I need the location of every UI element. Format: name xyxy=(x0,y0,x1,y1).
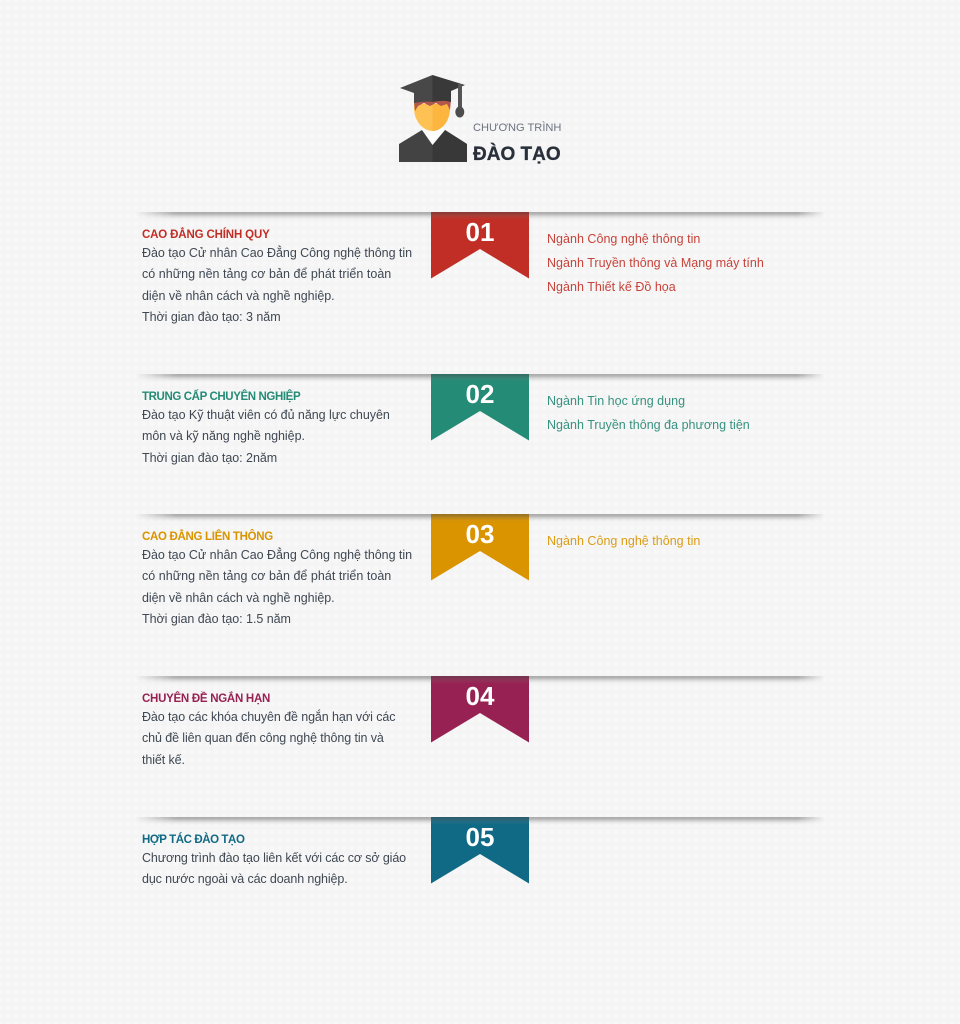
text 04: thiết kế. xyxy=(142,753,185,767)
text 01: Thời gian đào tạo: 3 năm xyxy=(142,310,281,324)
heading 03: CAO ĐẲNG LIÊN THÔNG xyxy=(142,531,273,543)
text 03: có những nền tảng cơ bản để phát triển toàn xyxy=(142,569,391,583)
majors 01: Ngành Truyền thông và Mạng máy tính xyxy=(547,256,764,270)
section 05 xyxy=(140,817,822,886)
text 05: dục nước ngoài và các doanh nghiệp. xyxy=(142,872,348,886)
text 01: Đào tạo Cử nhân Cao Đẳng Công nghệ thông tin xyxy=(142,246,412,260)
heading large: ĐÀO TẠO xyxy=(473,144,561,165)
majors 01: Ngành Thiết kế Đồ họa xyxy=(547,280,676,294)
majors 03: Ngành Công nghệ thông tin xyxy=(547,534,700,548)
text 04: Đào tạo các khóa chuyên đề ngắn hạn với các xyxy=(142,710,395,724)
header logo xyxy=(399,75,561,165)
text 03: Đào tạo Cử nhân Cao Đẳng Công nghệ thông tin xyxy=(142,548,412,562)
ribbon 02 xyxy=(431,374,529,440)
heading 05: HỢP TÁC ĐÀO TẠO xyxy=(142,834,244,846)
majors 01: Ngành Công nghệ thông tin xyxy=(547,232,700,246)
majors 02 xyxy=(547,394,750,432)
heading 01: CAO ĐẲNG CHÍNH QUY xyxy=(142,229,270,241)
text 02 xyxy=(142,408,390,465)
text 03: diện về nhân cách và nghề nghiệp. xyxy=(142,591,335,605)
number 03: 03 xyxy=(466,518,494,548)
number 04: 04 xyxy=(466,680,494,710)
majors 02: Ngành Truyền thông đa phương tiện xyxy=(547,418,750,432)
ribbon 01 xyxy=(431,212,529,278)
heading 02: TRUNG CẤP CHUYÊN NGHIỆP xyxy=(142,391,300,403)
text 02: môn và kỹ năng nghề nghiệp. xyxy=(142,429,305,443)
heading 04: CHUYÊN ĐỀ NGẮN HẠN xyxy=(142,693,270,705)
majors 01 xyxy=(547,232,764,294)
number 05: 05 xyxy=(466,822,494,852)
number 02: 02 xyxy=(466,378,494,408)
text 04 xyxy=(142,710,396,767)
text 05 xyxy=(142,851,406,886)
number 01: 01 xyxy=(466,216,494,246)
text 01: diện về nhân cách và nghề nghiệp. xyxy=(142,289,335,303)
text 01 xyxy=(142,246,412,324)
ribbon 04 xyxy=(431,676,529,742)
text 02: Đào tạo Kỹ thuật viên có đủ năng lực chuyên xyxy=(142,408,390,422)
section 04 xyxy=(140,676,822,767)
text 05: Chương trình đào tạo liên kết với các cơ sở giáo xyxy=(142,851,406,865)
ribbon 03 xyxy=(431,514,529,580)
ribbon 05 xyxy=(431,817,529,884)
majors 02: Ngành Tin học ứng dụng xyxy=(547,394,685,408)
text 03 xyxy=(142,548,412,626)
heading small: CHƯƠNG TRÌNH xyxy=(473,122,561,134)
text 03: Thời gian đào tạo: 1.5 năm xyxy=(142,612,291,626)
section 03 xyxy=(140,514,822,626)
section 01 xyxy=(140,212,822,324)
icon: graduate with cap xyxy=(399,75,467,162)
text 04: chủ đề liên quan đến công nghệ thông tin và xyxy=(142,731,384,745)
text 02: Thời gian đào tạo: 2năm xyxy=(142,451,277,465)
section 02 xyxy=(140,374,822,465)
text 01: có những nền tảng cơ bản để phát triển toàn xyxy=(142,267,391,281)
